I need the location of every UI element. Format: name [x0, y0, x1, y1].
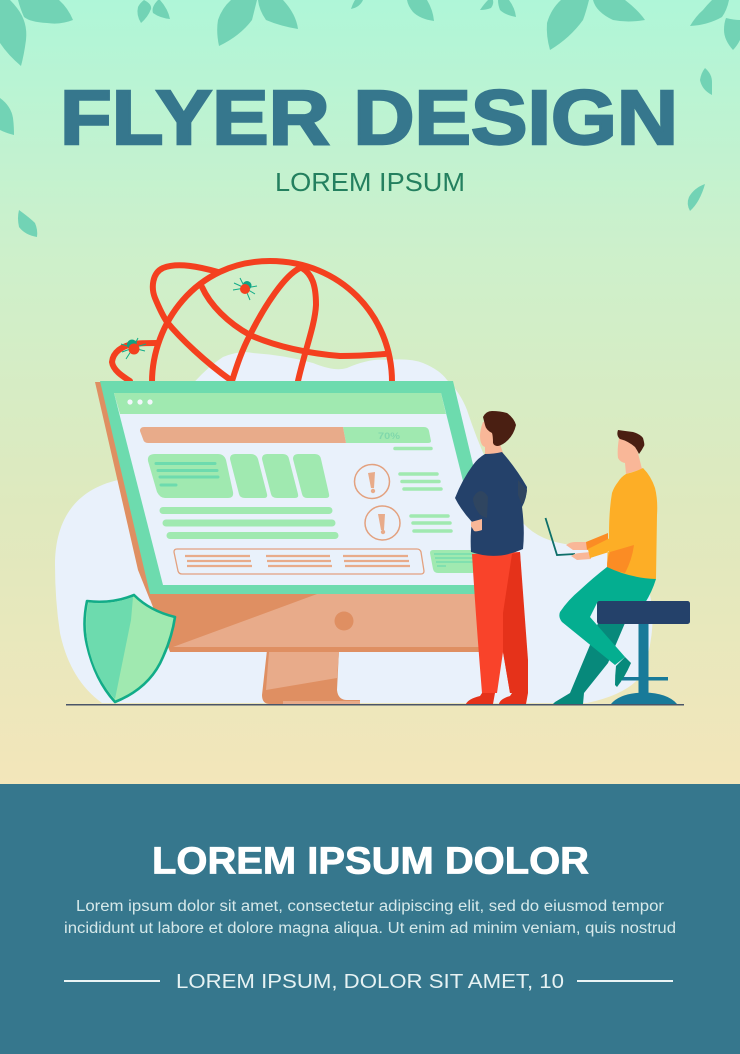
screen — [114, 393, 489, 585]
back leg — [553, 623, 625, 704]
footer heading: LOREM IPSUM DOLOR — [152, 840, 589, 882]
seated man — [546, 430, 657, 704]
ground line — [66, 704, 684, 706]
footer right rule — [577, 980, 673, 982]
background blob — [55, 352, 652, 703]
subtitle: LOREM IPSUM — [275, 169, 465, 197]
footer caption: LOREM IPSUM, DOLOR SIT AMET, 10 — [176, 970, 564, 993]
content cards — [148, 454, 329, 498]
small green card — [430, 550, 478, 573]
monitor frame — [100, 381, 504, 594]
trousers — [472, 552, 528, 693]
sweater fold — [607, 545, 634, 573]
sweater — [455, 452, 527, 556]
outlined table — [174, 549, 424, 574]
alert marks — [368, 472, 385, 534]
title: FLYER DESIGN — [60, 75, 678, 161]
laptop — [546, 518, 575, 555]
monitor — [95, 381, 505, 652]
power button — [334, 612, 354, 630]
dark thigh wedge — [620, 590, 645, 603]
sweater arm — [588, 538, 640, 558]
background gradient — [0, 0, 740, 784]
progress bar: 70% — [378, 431, 401, 442]
stool seat — [597, 601, 690, 624]
footer panel — [0, 784, 740, 1054]
bug on orbit — [121, 338, 146, 359]
sweater — [588, 468, 657, 579]
neck and face — [618, 438, 642, 474]
progress bar — [140, 427, 431, 448]
footer left rule — [64, 980, 160, 982]
footer body text — [64, 898, 676, 937]
footer body text: Lorem ipsum dolor sit amet, consectetur adipiscing elit, sed do eiusmod tempor — [76, 898, 664, 915]
hand — [471, 519, 482, 531]
card text lines — [156, 464, 218, 485]
window dots — [127, 399, 153, 405]
back sleeve — [586, 533, 608, 550]
shield — [84, 595, 175, 702]
bug on globe — [233, 278, 257, 300]
monitor bezel side — [95, 382, 152, 600]
decorative leaves — [0, 0, 740, 237]
long text lines — [163, 510, 335, 536]
globe with orbits — [112, 261, 392, 382]
hair — [483, 411, 516, 446]
sweater shadows — [473, 480, 527, 518]
footer body text: incididunt ut labore et dolore magna aliqua. Ut enim ad minim veniam, quis nostrud — [64, 920, 676, 937]
standing man — [455, 411, 528, 704]
neck and face — [480, 420, 503, 456]
monitor stand — [262, 650, 360, 704]
shoes — [466, 693, 528, 704]
hands — [566, 542, 591, 560]
alert icons — [354, 464, 400, 540]
monitor chin — [148, 594, 505, 652]
front shoe — [615, 657, 631, 687]
hair — [617, 430, 644, 454]
browser header — [114, 393, 446, 414]
stool legs — [611, 622, 677, 704]
front leg — [559, 567, 656, 665]
alert text lines — [400, 474, 451, 531]
